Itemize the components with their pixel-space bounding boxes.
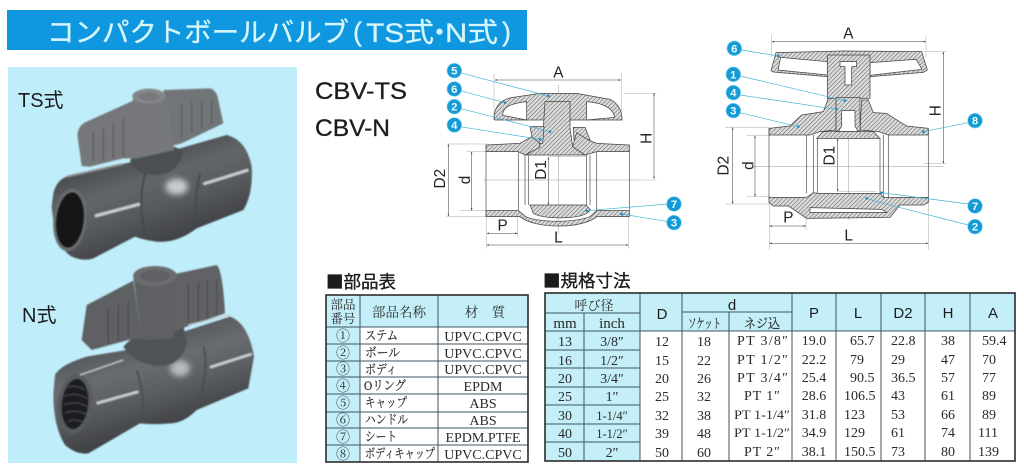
table header: mm xyxy=(553,316,577,332)
table header: 材 質 xyxy=(465,304,506,320)
column: D2: 73 xyxy=(891,445,905,460)
table header: ソケット xyxy=(688,316,721,331)
column: d threaded: PT 2″ xyxy=(744,445,780,460)
row numbers: ① xyxy=(336,329,350,345)
part names: ハンドル xyxy=(365,412,408,427)
column: L xyxy=(844,334,876,460)
column: P: 31.8 xyxy=(802,408,826,423)
title banner xyxy=(7,10,527,50)
column: nominal size: 3/4″ xyxy=(600,372,624,387)
dimension labels: A xyxy=(553,64,564,81)
part number callouts: 8 xyxy=(972,116,978,128)
column: d socket: 60 xyxy=(697,446,711,461)
column: H: 38 xyxy=(941,334,955,349)
column: A: 77 xyxy=(982,371,996,386)
column: nominal size: 40 xyxy=(558,427,572,442)
part names: ボディ xyxy=(365,362,397,377)
dimension labels xyxy=(432,64,656,246)
part materials: EPDM xyxy=(464,380,503,395)
column: A: 70 xyxy=(982,353,996,368)
part materials: UPVC.CPVC xyxy=(444,330,522,345)
part materials xyxy=(444,330,522,463)
title banner: ( xyxy=(353,17,362,47)
table header: 部品 xyxy=(330,297,356,312)
column: A: 89 xyxy=(982,389,996,404)
column: L: 123 xyxy=(844,408,865,423)
row numbers xyxy=(336,329,350,463)
part materials: ABS xyxy=(469,397,497,412)
column: nominal size: 50 xyxy=(558,446,572,461)
dimension labels: H xyxy=(928,105,945,116)
dimension labels: H xyxy=(639,133,656,144)
column: L: 129 xyxy=(844,426,865,441)
table header: inch xyxy=(599,316,625,332)
column: nominal size: 20 xyxy=(558,372,572,387)
dimension labels: P xyxy=(783,210,793,227)
row numbers: ⑥ xyxy=(336,413,350,429)
part number callouts: 4 xyxy=(730,88,737,100)
dimension labels: D2 xyxy=(432,169,449,188)
column: D2: 36.5 xyxy=(891,371,916,386)
table header: D xyxy=(657,306,668,323)
photo: TS type valve xyxy=(50,88,252,260)
column: L: 79 xyxy=(850,353,864,368)
column: d threaded: PT 1″ xyxy=(744,389,780,404)
table header xyxy=(330,297,506,326)
dimension labels: L xyxy=(844,228,853,245)
table header: d xyxy=(728,297,736,314)
dimension labels: D1 xyxy=(533,160,550,180)
column: D: 39 xyxy=(655,427,669,442)
dimension labels xyxy=(716,25,945,245)
title banner: N式 xyxy=(445,18,498,48)
column: L: 106.5 xyxy=(844,389,876,404)
table header: 番号 xyxy=(330,311,356,326)
column: d socket: 18 xyxy=(697,335,711,350)
column: A: 59.4 xyxy=(982,334,1006,349)
title banner: ・ xyxy=(426,18,453,48)
column: A: 89 xyxy=(982,408,996,423)
part materials: EPDM.PTFE xyxy=(445,431,521,446)
column: P: 38.1 xyxy=(802,445,826,460)
table header: D2 xyxy=(893,305,913,322)
column: H: 57 xyxy=(941,371,955,386)
column: A xyxy=(978,334,1006,460)
label: N type: N式 xyxy=(22,304,56,327)
dimension labels: D2 xyxy=(716,156,733,175)
part number callouts: 7 xyxy=(671,199,677,211)
part number callouts: 1 xyxy=(730,69,736,81)
column: H: 61 xyxy=(941,389,955,404)
dimension labels: d xyxy=(457,176,474,184)
column: D2: 22.8 xyxy=(891,334,916,349)
heading: parts list: ■部品表 xyxy=(326,269,396,294)
column: nominal size: 3/8″ xyxy=(600,335,624,350)
column: P: 25.4 xyxy=(802,371,826,386)
dimension labels: A xyxy=(843,25,854,42)
table header: 呼び径 xyxy=(574,298,614,313)
row numbers: ⑦ xyxy=(336,430,350,446)
part number callouts: 3 xyxy=(671,218,677,230)
model names: CBV-TS xyxy=(315,78,407,105)
panel: product photos xyxy=(8,67,297,463)
column: D: 12 xyxy=(655,335,669,350)
part names: ボール xyxy=(365,345,400,360)
row numbers: ③ xyxy=(336,362,350,378)
part number callouts: 4 xyxy=(451,120,458,132)
title banner: TS式 xyxy=(366,18,434,48)
column: nominal size: 25 xyxy=(558,390,572,405)
column: L: 65.7 xyxy=(850,334,874,349)
column: D2: 43 xyxy=(891,389,905,404)
column: D: 20 xyxy=(655,372,669,387)
part number callouts: 5 xyxy=(451,66,457,78)
part materials: ABS xyxy=(469,414,497,429)
row numbers: ② xyxy=(336,346,350,362)
table header: H xyxy=(943,305,953,322)
row numbers: ⑧ xyxy=(336,447,350,463)
column: d threaded: PT 1/2″ xyxy=(737,353,788,368)
part number callouts: 7 xyxy=(972,201,978,213)
column: nominal size: 16 xyxy=(558,354,572,369)
table header: 部品名称 xyxy=(372,304,426,320)
column: d threaded: PT 3/4″ xyxy=(737,371,788,386)
column: nominal size: 1-1/2″ xyxy=(596,427,628,441)
table header: L xyxy=(854,305,862,322)
part number callouts: 3 xyxy=(730,106,736,118)
part materials: UPVC.CPVC xyxy=(444,363,522,378)
column: d socket xyxy=(697,335,711,461)
diagram: TS type cross-section xyxy=(432,63,681,248)
column: d socket: 32 xyxy=(697,390,711,405)
column: nominal size: 1/2″ xyxy=(600,354,624,369)
column: P: 28.6 xyxy=(802,389,826,404)
column: D2: 53 xyxy=(891,408,905,423)
diagram: N type cross-section xyxy=(716,25,982,250)
photo: N type valve xyxy=(53,265,254,454)
column: D: 32 xyxy=(655,409,669,424)
column: A: 111 xyxy=(978,426,998,441)
table: dimensions xyxy=(545,293,1015,461)
column: D2: 61 xyxy=(891,426,905,441)
column: d socket: 26 xyxy=(697,372,711,387)
column: D: 50 xyxy=(655,446,669,461)
column: d threaded: PT 1-1/4″ xyxy=(734,407,790,422)
column: D: 15 xyxy=(655,354,669,369)
part names: シート xyxy=(365,429,397,444)
column: P: 22.2 xyxy=(802,353,826,368)
column: d threaded xyxy=(734,334,790,460)
column: d socket: 22 xyxy=(697,354,711,369)
column: nominal size xyxy=(558,335,628,461)
dimension labels: L xyxy=(554,229,563,246)
part materials: UPVC.CPVC xyxy=(444,347,522,362)
dimension labels: D1 xyxy=(821,146,838,165)
part materials: UPVC.CPVC xyxy=(444,448,522,463)
part names: ステム xyxy=(365,328,398,343)
column: D xyxy=(655,335,669,461)
model names xyxy=(315,78,407,142)
column: D2: 29 xyxy=(891,353,905,368)
column: L: 90.5 xyxy=(850,371,874,386)
column: nominal size: 1-1/4″ xyxy=(596,409,628,423)
column: d threaded: PT 3/8″ xyxy=(737,334,788,349)
column: nominal size: 1″ xyxy=(606,390,619,405)
row numbers: ④ xyxy=(336,379,350,395)
column: H xyxy=(941,334,955,460)
table: parts list xyxy=(326,295,528,463)
part number callouts: 2 xyxy=(451,102,457,114)
column: nominal size: 13 xyxy=(558,335,572,350)
column: d socket: 38 xyxy=(697,409,711,424)
column: A: 139 xyxy=(978,445,999,460)
column: D: 25 xyxy=(655,390,669,405)
table header: P xyxy=(809,305,819,322)
heading: dimensions: ■規格寸法 xyxy=(543,268,630,293)
part number callouts xyxy=(726,41,982,234)
table header: A xyxy=(988,305,998,322)
part number callouts xyxy=(447,63,681,230)
column: H: 74 xyxy=(941,426,955,441)
column: P xyxy=(802,334,826,460)
column: nominal size: 2″ xyxy=(606,446,619,461)
column: H: 47 xyxy=(941,353,955,368)
column: d socket: 48 xyxy=(697,427,711,442)
title banner: ) xyxy=(502,17,511,47)
model names: CBV-N xyxy=(315,115,390,142)
dimension labels: d xyxy=(740,161,757,170)
column: L: 150.5 xyxy=(844,445,876,460)
table header xyxy=(553,297,998,332)
part names: ボディキャップ xyxy=(365,446,435,461)
part number callouts: 6 xyxy=(731,43,737,55)
title banner: コンパクトボールバルブ xyxy=(47,18,349,48)
part number callouts: 6 xyxy=(451,84,457,96)
part names: キャップ xyxy=(365,395,407,410)
part names: Oリング xyxy=(364,378,406,393)
part names xyxy=(364,328,435,461)
dimension labels: P xyxy=(498,218,508,235)
column: d threaded: PT 1-1/2″ xyxy=(734,425,790,440)
column: H: 66 xyxy=(941,408,955,423)
column: nominal size: 30 xyxy=(558,409,572,424)
column: D2 xyxy=(891,334,916,460)
table header: ネジ込 xyxy=(744,316,780,331)
label: TS type: TS式 xyxy=(18,89,64,112)
column: P: 19.0 xyxy=(802,334,826,349)
column: P: 34.9 xyxy=(802,426,826,441)
column: H: 80 xyxy=(941,445,955,460)
part number callouts: 2 xyxy=(972,222,978,234)
row numbers: ⑤ xyxy=(336,396,350,412)
